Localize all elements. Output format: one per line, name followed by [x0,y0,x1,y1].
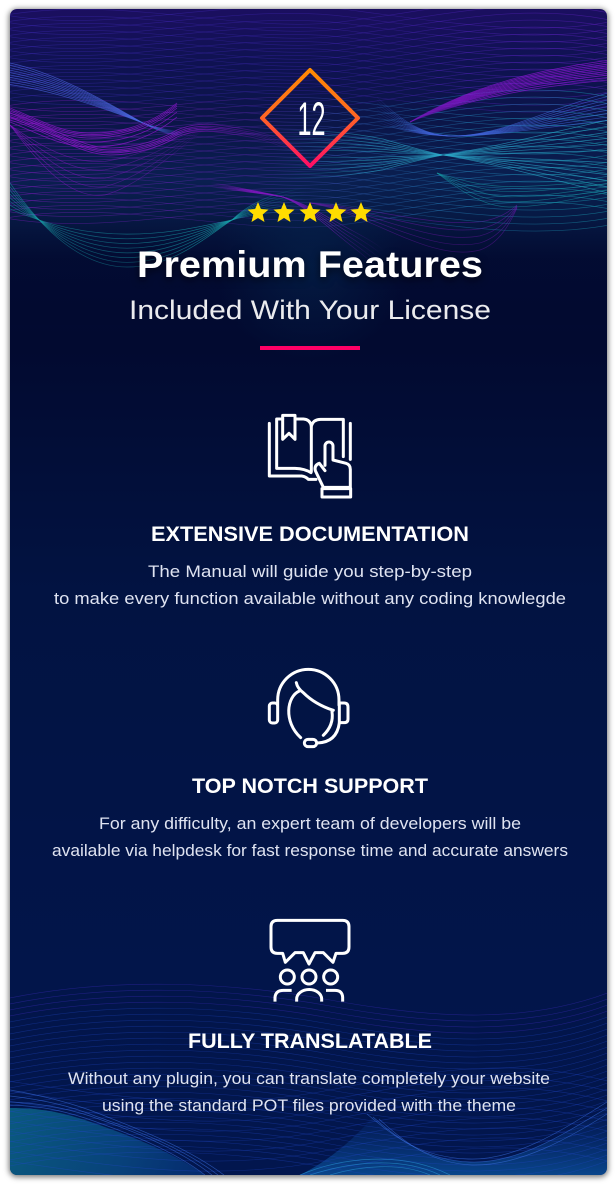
teal ribbon [273,120,608,193]
text: documentation description: The Manual will guide you step-by-step [148,562,472,581]
heading: support: TOP NOTCH SUPPORT [192,775,428,798]
text: support description: For any difficulty, an expert team of developers will be [99,814,521,833]
title: Premium Features [137,244,483,285]
right purple ribbon [410,60,610,122]
text: support description: available via helpdesk for fast response time and accurate answers [52,841,568,860]
right purple bowl [310,203,517,252]
text: documentation description [54,562,566,608]
badge: diamond with number 12 [262,70,358,166]
left blue ribbon [10,63,185,137]
icon: book with pointing hand [269,415,351,497]
text: translatable description: Without any plugin, you can translate completely your website [68,1069,550,1088]
right blue ribbon [377,93,608,136]
text: translatable description [68,1069,550,1115]
accent divider [260,346,360,350]
left purple ribbons [10,102,299,156]
left teal bowl [10,183,307,267]
left purple bowl [10,125,210,195]
text: documentation description: to make every function available without any coding knowlegde [54,589,566,608]
icon: support headset [269,669,348,747]
bottom wave mesh [0,984,616,1183]
text: support description [52,814,568,860]
rating: five stars [248,202,372,222]
right teal bowl [437,173,612,207]
fade of waves into the dark header [44,223,588,268]
subtitle: Included With Your License [129,295,491,325]
text: translatable description: using the standard POT files provided with the theme [102,1096,516,1115]
top wave mesh [0,0,616,231]
heading: documentation: EXTENSIVE DOCUMENTATION [151,523,469,546]
heading: translatable: FULLY TRANSLATABLE [188,1030,432,1053]
icon: speech bubble and people [271,920,349,1002]
centre purple crossing [214,182,376,260]
badge: diamond with number 12: 12 [298,92,326,145]
